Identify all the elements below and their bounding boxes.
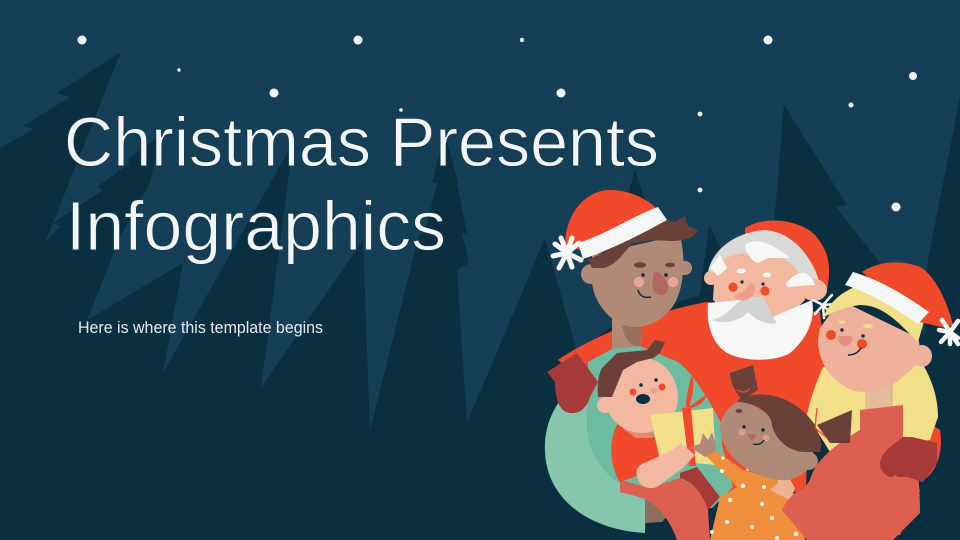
woman hat bbox=[862, 262, 953, 328]
woman neck bbox=[865, 385, 893, 410]
girl orange shirt with dots bbox=[705, 450, 805, 540]
girl bun bbox=[730, 365, 758, 400]
girl ear bbox=[798, 452, 818, 470]
woman mitten bbox=[880, 437, 937, 482]
man head bbox=[592, 235, 683, 327]
girl head bbox=[720, 400, 815, 480]
santa face details bbox=[728, 268, 771, 300]
santa beard bbox=[708, 300, 813, 360]
woman face details bbox=[826, 320, 873, 355]
boy face details bbox=[630, 378, 666, 404]
woman face bbox=[818, 300, 920, 392]
girl right hand bbox=[770, 475, 795, 500]
girl bbox=[690, 365, 852, 540]
santa hair curl and sideburns bbox=[710, 241, 815, 287]
boy bbox=[597, 340, 720, 540]
subtitle: Here is where this template begins bbox=[78, 318, 323, 337]
woman fringe bbox=[823, 285, 925, 342]
boy ear bbox=[597, 397, 613, 413]
title: Infographics bbox=[66, 187, 446, 265]
title bbox=[64, 103, 659, 265]
santa ears bbox=[704, 271, 827, 301]
woman back hair bbox=[807, 360, 938, 452]
santa hat band bbox=[708, 230, 820, 292]
man face details bbox=[634, 262, 678, 297]
woman sweater bbox=[782, 405, 920, 540]
woman ear bbox=[912, 345, 932, 367]
santa face bbox=[713, 252, 805, 325]
santa mustache bbox=[712, 297, 777, 324]
boy collar bbox=[622, 428, 655, 438]
man mitten bbox=[547, 353, 598, 413]
man teal arm bbox=[545, 372, 646, 533]
boy head bbox=[603, 358, 678, 433]
man hat band bbox=[578, 207, 667, 259]
woman bbox=[782, 262, 958, 540]
title: Christmas Presents bbox=[64, 103, 659, 181]
woman hat band bbox=[845, 272, 929, 324]
man ears bbox=[581, 261, 692, 284]
boy maroon leg bbox=[680, 467, 720, 510]
boy legs bbox=[620, 478, 710, 540]
girl pigtail bbox=[817, 410, 852, 443]
man hair bbox=[588, 216, 698, 268]
boy hair bbox=[598, 340, 665, 397]
woman pompom bbox=[939, 320, 958, 344]
boy shirt bbox=[611, 423, 662, 482]
man hat bbox=[565, 190, 660, 250]
red sliver behind woman bbox=[920, 420, 941, 482]
man teal torso bbox=[587, 346, 733, 508]
man hand bbox=[645, 498, 668, 523]
family illustration bbox=[545, 190, 958, 540]
santa body bbox=[558, 302, 826, 492]
gift box bbox=[650, 375, 716, 466]
girl hair ties bbox=[737, 388, 827, 438]
girl hair bbox=[738, 394, 821, 452]
man neck bbox=[612, 318, 642, 352]
boy arm bbox=[637, 443, 695, 488]
man bbox=[545, 190, 733, 533]
girl face details bbox=[736, 409, 770, 444]
santa bbox=[704, 221, 836, 360]
girl left hand bbox=[690, 432, 716, 457]
snow dots bbox=[78, 36, 917, 212]
santa hat bbox=[745, 221, 829, 290]
santa snowflake bbox=[813, 295, 836, 318]
woman arm over girl bbox=[782, 475, 920, 540]
man neck shadow bbox=[622, 320, 642, 347]
man pompom bbox=[553, 238, 581, 268]
